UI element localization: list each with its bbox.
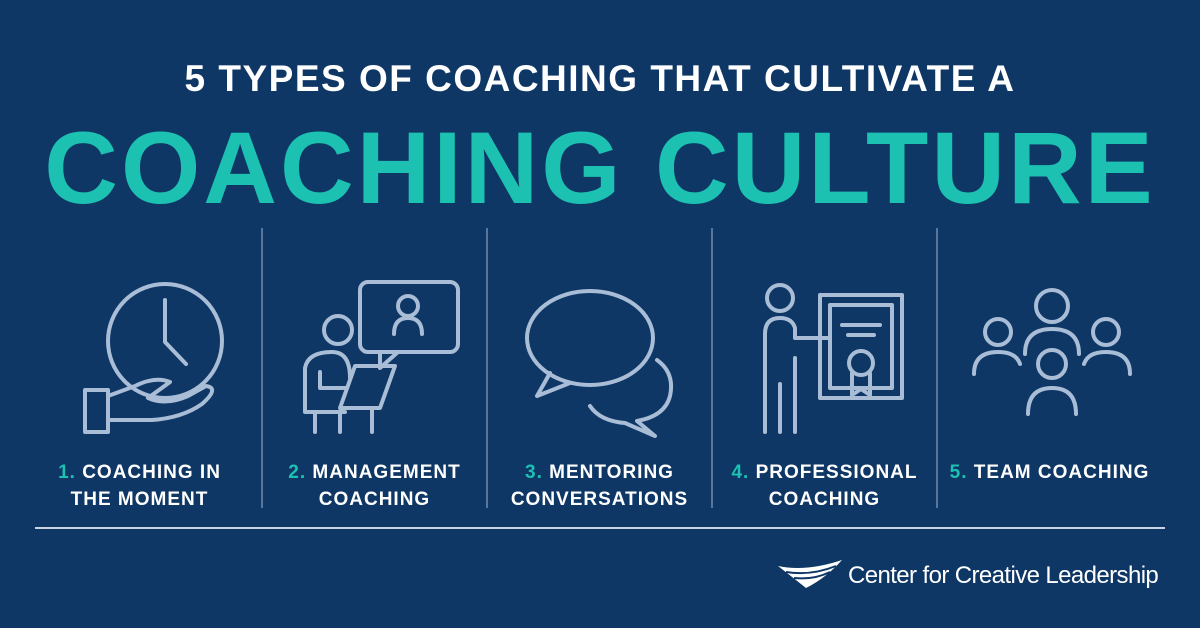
icon: management coaching (303, 280, 460, 434)
icon: clock in hand (83, 282, 224, 434)
label 1 (58, 462, 221, 510)
logo: Center for Creative Leadership (848, 562, 1158, 589)
icon: speech bubbles (525, 289, 674, 438)
label 3 (511, 462, 688, 510)
title line 2: COACHING CULTURE (44, 111, 1156, 225)
label 5: 5. TEAM COACHING (950, 462, 1149, 483)
label 2: 2. MANAGEMENT (288, 462, 461, 483)
label 4 (731, 462, 918, 510)
title line 1: 5 TYPES OF COACHING THAT CULTIVATE A (184, 58, 1016, 99)
label 1: THE MOMENT (71, 489, 208, 510)
icon: professional coaching (763, 283, 904, 434)
label 3: CONVERSATIONS (511, 489, 688, 510)
label 1: 1. COACHING IN (58, 462, 221, 483)
label 2 (288, 462, 461, 510)
label 4: 4. PROFESSIONAL (731, 462, 918, 483)
label 3: 3. MENTORING (525, 462, 674, 483)
label 2: COACHING (319, 489, 430, 510)
icon: team (972, 288, 1132, 416)
label 4: COACHING (769, 489, 880, 510)
